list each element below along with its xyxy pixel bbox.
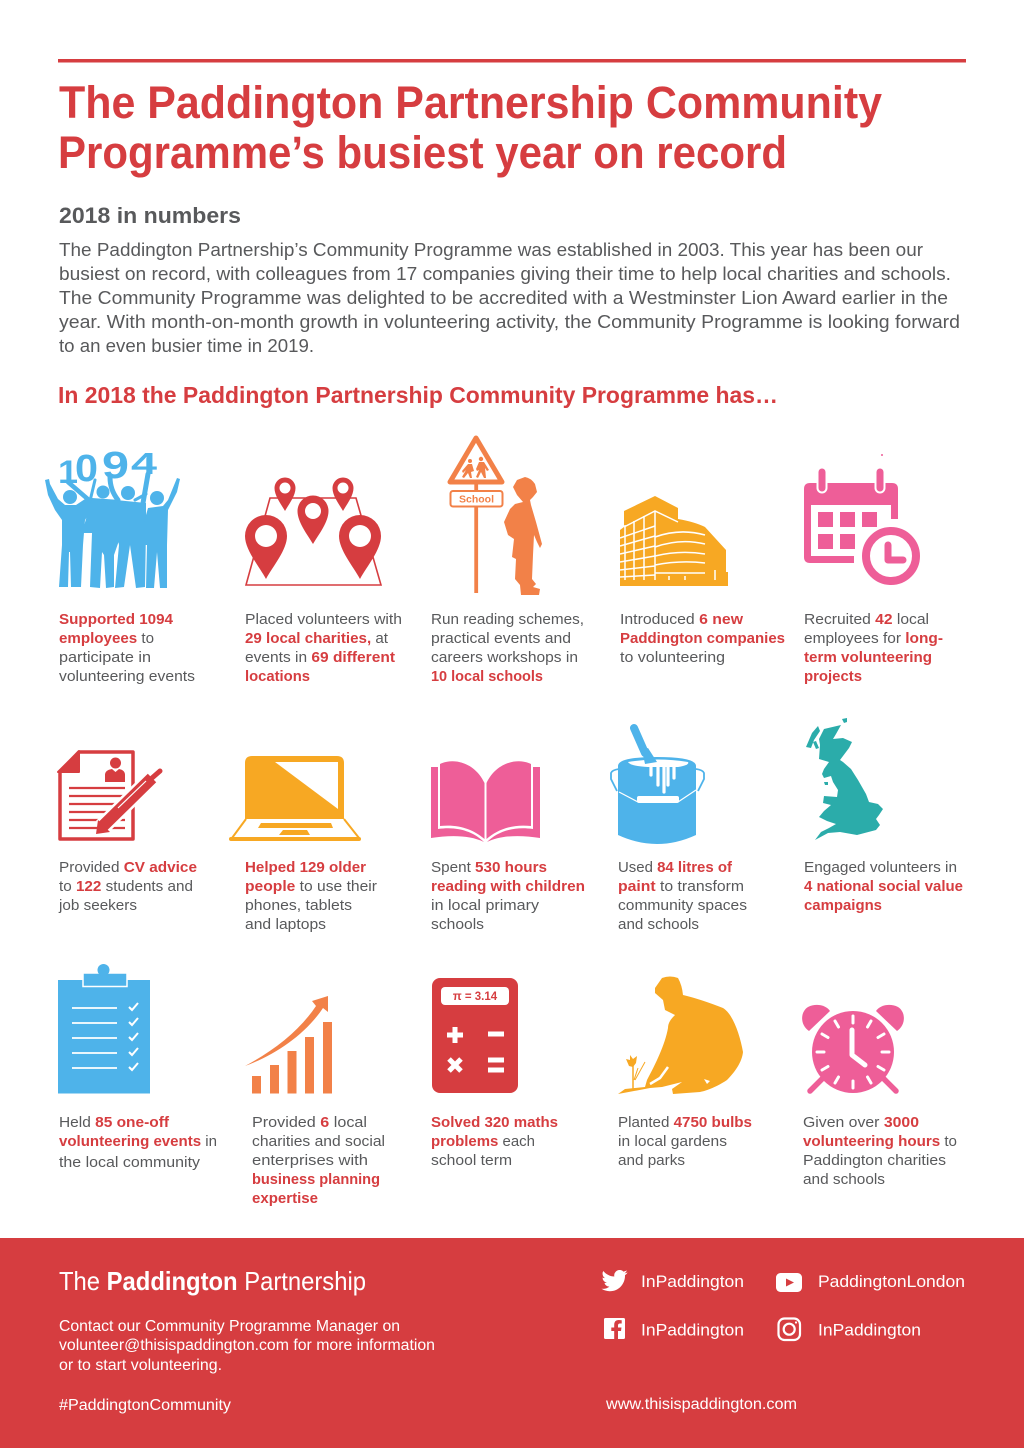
icon: clipboard bbox=[58, 964, 150, 1094]
icon: calculator: π = 3.14 bbox=[453, 991, 498, 1003]
website: www.thisispaddington.com bbox=[605, 1396, 797, 1413]
text bbox=[620, 611, 785, 666]
text bbox=[245, 611, 402, 685]
text: the local community bbox=[59, 1154, 201, 1171]
text bbox=[245, 859, 377, 933]
icon: school sign and child: School bbox=[459, 494, 494, 506]
intro paragraph: The Paddington Partnership’s Community Programme was established in 2003. This year has been our bbox=[59, 240, 923, 260]
text: Planted 4750 bulbs bbox=[618, 1114, 752, 1131]
text: Given over 3000 bbox=[803, 1114, 919, 1131]
icon: youtube bbox=[776, 1273, 802, 1292]
text: Provided 6 local bbox=[252, 1114, 367, 1131]
text: practical events and bbox=[431, 630, 571, 647]
text: locations bbox=[245, 668, 310, 685]
contact text: Contact our Community Programme Manager on bbox=[59, 1318, 400, 1335]
text: enterprises with bbox=[252, 1152, 368, 1169]
handle: facebook: InPaddington bbox=[641, 1320, 744, 1340]
icon: people with 1094: 1 bbox=[58, 454, 78, 490]
panel: reading hours bbox=[431, 761, 585, 933]
panel: reading schemes bbox=[431, 438, 584, 685]
icon: laptop bbox=[229, 756, 361, 841]
text: volunteering events bbox=[59, 668, 195, 685]
text: Introduced 6 new bbox=[620, 611, 743, 628]
text: to volunteering bbox=[620, 649, 725, 666]
text: business planning bbox=[252, 1171, 380, 1188]
icon: map pins bbox=[245, 478, 381, 585]
text: careers workshops in bbox=[431, 649, 578, 666]
title: Programme’s busiest year on record bbox=[58, 127, 787, 178]
logo: The Paddington Partnership: The Paddington Partnership bbox=[59, 1266, 366, 1296]
text: phones, tablets bbox=[245, 897, 352, 914]
panel: long-term recruits bbox=[804, 454, 943, 685]
text: participate in bbox=[59, 649, 151, 666]
text: in local primary bbox=[431, 897, 540, 914]
text: job seekers bbox=[58, 897, 137, 914]
text: expertise bbox=[252, 1190, 318, 1207]
text: to 122 students and bbox=[59, 878, 193, 895]
panel: helped older people bbox=[229, 756, 377, 933]
text: employees for long- bbox=[804, 630, 943, 647]
text: Placed volunteers with bbox=[245, 611, 402, 628]
text bbox=[804, 611, 943, 685]
text: problems each bbox=[431, 1133, 535, 1150]
text: community spaces bbox=[618, 897, 747, 914]
icon: open book bbox=[431, 761, 540, 842]
text bbox=[252, 1114, 385, 1207]
text: paint to transform bbox=[618, 878, 744, 895]
icon: people with 1094: 4 bbox=[131, 446, 158, 481]
panel: litres of paint bbox=[611, 728, 747, 933]
icon: calendar and clock bbox=[804, 454, 916, 581]
intro paragraph: busiest on record, with colleagues from 17 companies giving their time to help local charities and schools. bbox=[59, 264, 951, 284]
text bbox=[431, 611, 584, 685]
text bbox=[618, 859, 747, 933]
text: Recruited 42 local bbox=[804, 611, 929, 628]
text: Used 84 litres of bbox=[618, 859, 733, 876]
panel: volunteering hours bbox=[802, 1005, 957, 1188]
panel: national campaigns bbox=[804, 718, 963, 914]
text bbox=[804, 859, 963, 914]
panel: new companies bbox=[620, 496, 785, 666]
text: events in 69 different bbox=[245, 649, 395, 666]
text bbox=[59, 611, 195, 685]
intro paragraph: year. With month-on-month growth in volunteering activity, the Community Programme is looking forward bbox=[59, 312, 960, 332]
icon: alarm clock bbox=[802, 1005, 904, 1093]
text: and laptops bbox=[245, 916, 326, 933]
panel: CV advice bbox=[58, 751, 197, 914]
intro paragraph bbox=[59, 240, 960, 356]
footer panel bbox=[0, 1238, 1024, 1448]
text: and parks bbox=[618, 1152, 685, 1169]
panel: placed volunteers bbox=[245, 478, 402, 685]
text: school term bbox=[431, 1152, 512, 1169]
hashtag: #PaddingtonCommunity bbox=[59, 1397, 231, 1414]
text: projects bbox=[804, 668, 862, 685]
text: and schools bbox=[618, 916, 699, 933]
contact text bbox=[59, 1318, 435, 1374]
icon: gardener bbox=[618, 976, 743, 1094]
text: Paddington charities bbox=[803, 1152, 946, 1169]
text: 4 national social value bbox=[804, 878, 963, 895]
text: Solved 320 maths bbox=[431, 1114, 558, 1131]
icon: school sign and child bbox=[450, 438, 542, 595]
text: reading with children bbox=[431, 878, 585, 895]
text: Paddington companies bbox=[620, 630, 785, 647]
text bbox=[431, 859, 585, 933]
text: Run reading schemes, bbox=[431, 611, 584, 628]
panel: one-off events bbox=[58, 964, 217, 1171]
title: The Paddington Partnership Community bbox=[59, 77, 882, 128]
text: Engaged volunteers in bbox=[804, 859, 957, 876]
handle: youtube: PaddingtonLondon bbox=[818, 1272, 965, 1291]
icon: facebook bbox=[604, 1318, 625, 1339]
icon: twitter bbox=[602, 1270, 628, 1291]
icon: building bbox=[620, 496, 728, 586]
text bbox=[431, 1114, 558, 1169]
intro paragraph: to an even busier time in 2019. bbox=[59, 336, 314, 356]
icon: calculator bbox=[432, 978, 518, 1093]
text: people to use their bbox=[245, 878, 377, 895]
text: Provided CV advice bbox=[59, 859, 197, 876]
icon: UK map bbox=[806, 718, 883, 840]
subheading: In 2018 the Paddington Partnership Community Programme has… bbox=[58, 382, 778, 408]
intro paragraph: The Community Programme was delighted to be accredited with a Westminster Lion Award earlier in the bbox=[59, 288, 948, 308]
panel: bulbs bbox=[618, 976, 752, 1169]
text: campaigns bbox=[804, 897, 882, 914]
panel: business planning bbox=[245, 996, 385, 1207]
icon: people with 1094: 9 bbox=[102, 445, 129, 487]
text bbox=[58, 859, 197, 914]
text: and schools bbox=[803, 1171, 885, 1188]
panel: maths problems bbox=[431, 978, 558, 1169]
text: Spent 530 hours bbox=[431, 859, 547, 876]
handle: instagram: InPaddington bbox=[818, 1320, 921, 1340]
icon: CV and pen bbox=[58, 751, 160, 839]
text bbox=[803, 1114, 957, 1188]
text: Helped 129 older bbox=[245, 859, 366, 876]
text: in local gardens bbox=[618, 1133, 727, 1150]
panel: supported employees bbox=[45, 445, 195, 685]
heading: 2018 in numbers: 2018 in numbers bbox=[59, 203, 241, 228]
text: term volunteering bbox=[804, 649, 932, 666]
icon: people with 1094 bbox=[45, 445, 180, 588]
icon: instagram bbox=[778, 1318, 800, 1340]
icon: paint can bbox=[611, 728, 704, 844]
title bbox=[58, 77, 882, 178]
text: 29 local charities, at bbox=[245, 630, 389, 647]
text: Supported 1094 bbox=[59, 611, 174, 628]
text: schools bbox=[431, 916, 484, 933]
icon: people with 1094: 0 bbox=[75, 448, 98, 490]
contact text: volunteer@thisispaddington.com for more information bbox=[59, 1337, 435, 1354]
text: employees to bbox=[59, 630, 154, 647]
contact text: or to start volunteering. bbox=[59, 1357, 222, 1374]
text: volunteering hours to bbox=[803, 1133, 957, 1150]
text: Held 85 one-off bbox=[59, 1114, 170, 1131]
icon: growth chart bbox=[245, 996, 332, 1094]
text: volunteering events in bbox=[59, 1133, 217, 1150]
text: 10 local schools bbox=[431, 668, 543, 685]
handle: twitter: InPaddington bbox=[641, 1272, 744, 1291]
text bbox=[618, 1114, 752, 1169]
text bbox=[59, 1114, 217, 1171]
text: charities and social bbox=[252, 1133, 385, 1150]
